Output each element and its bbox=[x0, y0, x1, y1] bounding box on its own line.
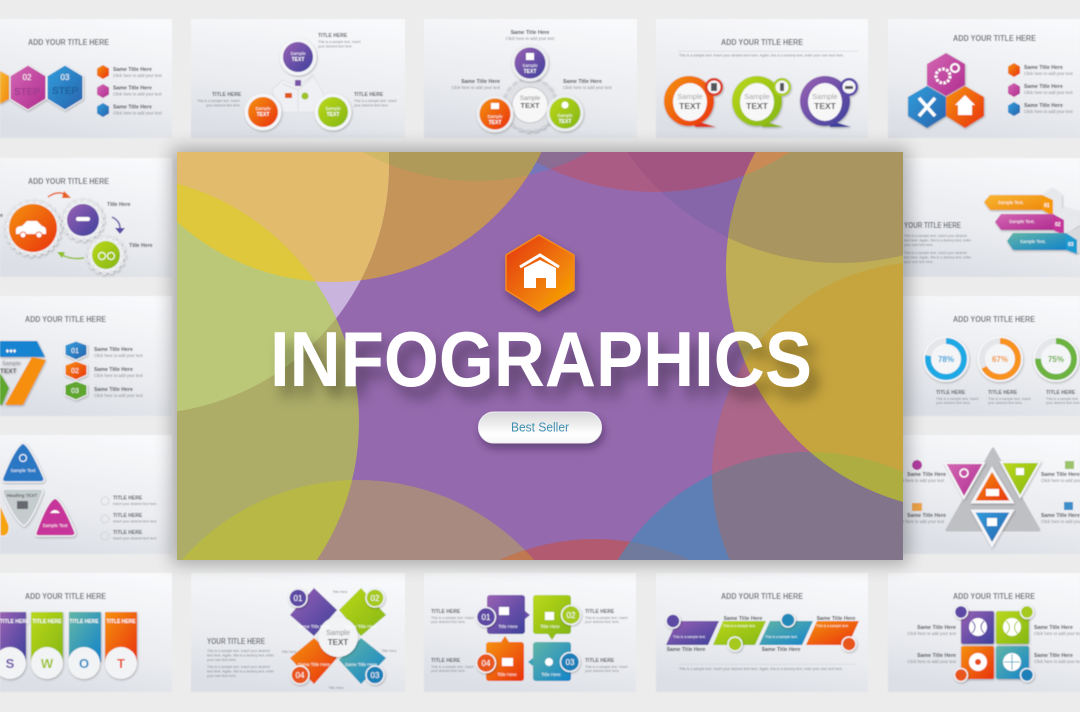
W column bbox=[31, 612, 63, 679]
S column: S bbox=[6, 656, 15, 671]
ring 75: 75% bbox=[1048, 355, 1064, 364]
labels bbox=[431, 609, 628, 673]
step hexagons: 02 bbox=[23, 73, 32, 82]
green circle: Sample bbox=[325, 106, 341, 111]
orange circle: Sample bbox=[255, 106, 271, 111]
gear green bbox=[88, 237, 124, 273]
purple square bbox=[487, 595, 530, 634]
list: Click here to add your text bbox=[1024, 71, 1073, 76]
ring 78: 78% bbox=[938, 355, 954, 364]
arrow 03: 03 bbox=[1068, 242, 1074, 248]
labels: Same Title Here bbox=[724, 616, 763, 622]
text block: This is a sample text. Insert your desired bbox=[207, 649, 270, 653]
S column bbox=[0, 612, 30, 679]
magenta triangle bbox=[35, 498, 75, 536]
card: speech circles bbox=[656, 19, 868, 138]
step hexagons: 03 bbox=[61, 73, 70, 82]
icon: house hexagon bbox=[506, 235, 574, 311]
card: triangle ring bbox=[0, 296, 172, 416]
numbered badges: 03 bbox=[371, 671, 380, 680]
purple circle: Sample bbox=[522, 63, 538, 68]
labels bbox=[936, 390, 1080, 405]
heading: ADD YOUR TITLE HERE bbox=[25, 315, 107, 324]
center gear bbox=[504, 79, 556, 131]
labels: Same Title Here bbox=[817, 616, 856, 622]
center circle: Sample bbox=[326, 630, 350, 637]
orange circle: TEXT bbox=[257, 112, 269, 118]
labels: This is a sample text. Insert bbox=[431, 665, 474, 669]
parallelograms: This is a sample text. bbox=[723, 624, 756, 628]
center gear: TEXT bbox=[520, 101, 540, 110]
T column: TITLE HERE bbox=[106, 619, 136, 625]
arrow 01: Sample Text. bbox=[998, 200, 1024, 205]
labels: Same Title Here bbox=[94, 367, 133, 373]
W column: W bbox=[41, 656, 54, 671]
T column: T bbox=[117, 656, 125, 671]
caption: This is a sample text. Insert your desired text here. Again, this is a dummy text, enter your own text here. bbox=[679, 667, 843, 671]
orange triangle bbox=[973, 469, 1012, 502]
body text: your own text here. bbox=[904, 260, 934, 264]
labels: Same Title Here bbox=[511, 30, 550, 36]
arrow 03: Sample Text. bbox=[1020, 239, 1046, 244]
speech circle 2 bbox=[732, 76, 791, 127]
list: Same Title Here bbox=[1024, 84, 1063, 90]
labels: This is a sample text. bbox=[1046, 397, 1079, 401]
numbered badges bbox=[476, 606, 580, 672]
labels: your desired text here. bbox=[318, 44, 353, 48]
blue square: Title Here bbox=[541, 672, 561, 677]
text block: YOUR TITLE HERE bbox=[207, 637, 266, 646]
hex list: 02 bbox=[71, 368, 79, 375]
labels: Same Title Here bbox=[298, 662, 331, 667]
ring segments bbox=[0, 341, 46, 405]
purple circle bbox=[512, 44, 548, 82]
labels: your desired text here. bbox=[1046, 401, 1080, 405]
text block: This is a sample text. Insert your desired bbox=[207, 665, 270, 669]
labels bbox=[895, 460, 1080, 524]
labels: TITLE HERE bbox=[431, 609, 461, 615]
orange circle: TEXT bbox=[489, 120, 501, 126]
grey triangle bbox=[3, 489, 43, 526]
arrow 02: Sample Text. bbox=[1009, 219, 1035, 224]
labels: TITLE HERE bbox=[585, 658, 615, 664]
green circle: Sample bbox=[557, 113, 573, 118]
body text: text here. Again, this is a dummy text, enter bbox=[904, 238, 972, 242]
badges bbox=[954, 606, 1034, 682]
body text: your own text here. bbox=[904, 243, 934, 247]
card: three hexagons bbox=[888, 19, 1080, 138]
card: percentage rings bbox=[903, 296, 1080, 416]
list: TITLE HERE bbox=[113, 496, 143, 502]
labels: Click here to add your text bbox=[94, 353, 143, 358]
labels: This is a sample text. Insert bbox=[585, 665, 628, 669]
center petals bbox=[272, 75, 324, 112]
heading: YOUR TITLE HERE bbox=[904, 221, 962, 230]
labels: Title Here bbox=[107, 202, 131, 208]
step hexagons: STEP bbox=[52, 86, 78, 97]
labels bbox=[281, 590, 397, 690]
magenta triangle bbox=[945, 463, 984, 498]
list: Insert your desired text here bbox=[113, 520, 157, 524]
labels: Title Here bbox=[281, 650, 297, 654]
orange square: Title Here bbox=[497, 672, 517, 677]
labels: Same Title Here bbox=[1041, 472, 1080, 478]
labels: Same Title Here bbox=[667, 647, 706, 653]
labels: Title Here bbox=[332, 590, 348, 594]
gear orange bbox=[6, 201, 60, 255]
green square: Title Here bbox=[540, 624, 560, 629]
list bbox=[101, 496, 157, 540]
purple square: Title Here bbox=[498, 624, 518, 629]
best seller button: Best Seller bbox=[511, 420, 570, 434]
labels: Click here to add your text bbox=[94, 393, 143, 398]
center circle bbox=[318, 617, 358, 657]
main panel bbox=[177, 152, 903, 560]
speech circle 1 bbox=[664, 76, 723, 127]
arrow 02 bbox=[995, 207, 1080, 235]
labels bbox=[197, 33, 397, 108]
orange circle bbox=[476, 96, 514, 132]
labels: This is a sample text. Insert bbox=[585, 616, 628, 620]
blue triangle bbox=[2, 443, 44, 482]
labels: This is a sample text. Insert bbox=[431, 616, 474, 620]
card: hexagon steps bbox=[0, 19, 172, 138]
speech circle 1: TEXT bbox=[679, 101, 702, 111]
blue triangle bbox=[973, 511, 1012, 545]
labels: Same Title Here bbox=[345, 662, 378, 667]
speech circle 3 bbox=[800, 76, 858, 127]
labels bbox=[667, 616, 856, 653]
labels: Click here to add your text bbox=[907, 659, 957, 664]
labels: Click here to add your text bbox=[907, 631, 957, 636]
S column: TITLE HERE bbox=[0, 619, 30, 625]
arrow orange bbox=[48, 191, 71, 198]
panel background circles bbox=[177, 152, 903, 560]
labels: Same Title Here bbox=[1034, 625, 1073, 631]
labels: TITLE HERE bbox=[431, 658, 461, 664]
heading: ADD YOUR TITLE HERE bbox=[953, 592, 1036, 601]
arrow 01: 01 bbox=[1044, 203, 1050, 209]
arrow 03 bbox=[1007, 227, 1080, 254]
T column bbox=[105, 612, 137, 679]
center circle: TEXT bbox=[328, 638, 348, 647]
labels: your desired text here. bbox=[988, 401, 1023, 405]
labels: Same Title Here bbox=[1034, 653, 1073, 659]
list: Same Title Here bbox=[1024, 65, 1063, 71]
labels: your desired text here. bbox=[936, 401, 971, 405]
purple circle: Sample bbox=[290, 51, 306, 56]
step list bbox=[97, 65, 162, 117]
gear purple bbox=[63, 200, 103, 240]
grey triangle: Heading TEXT bbox=[7, 493, 37, 498]
grey base triangle bbox=[947, 449, 1039, 530]
labels: Same Title Here bbox=[345, 624, 378, 629]
labels: Same Title Here bbox=[917, 653, 956, 659]
parallelograms bbox=[666, 621, 859, 645]
step hexagons bbox=[0, 65, 83, 110]
labels: TITLE HERE bbox=[1046, 390, 1076, 396]
labels: Title Here bbox=[328, 686, 344, 690]
list: Click here to add your text bbox=[1024, 109, 1073, 114]
card: speech circles: This is a sample text. Insert your desired text here. Again, this is a dummy text, enter your own text here. bbox=[679, 54, 844, 58]
card: four squares bbox=[424, 573, 636, 692]
list: Click here to add your text bbox=[1024, 90, 1073, 95]
orange square bbox=[486, 636, 524, 681]
labels: Click here to add your text bbox=[506, 36, 555, 41]
body text: This is a sample text. Insert your desired bbox=[904, 251, 967, 255]
step list: Same Title Here bbox=[113, 67, 152, 73]
labels: TITLE HERE bbox=[936, 390, 966, 396]
text block: text here. Again, this is a dummy text, enter bbox=[207, 654, 275, 658]
card: gears and vehicles bbox=[0, 158, 172, 277]
speech circle 2: Sample bbox=[744, 92, 770, 101]
arrow 01 bbox=[984, 188, 1062, 216]
list: TITLE HERE bbox=[113, 530, 143, 536]
labels: your desired text here. bbox=[206, 104, 241, 108]
labels: TITLE HERE bbox=[354, 92, 384, 98]
numbered badges: 02 bbox=[567, 611, 576, 620]
labels bbox=[0, 202, 153, 249]
speech circle 2: TEXT bbox=[746, 101, 769, 111]
step list: Same Title Here bbox=[113, 104, 152, 110]
squares bbox=[961, 611, 1029, 679]
heading: ADD YOUR TITLE HERE bbox=[28, 38, 110, 47]
step list: Click here to add your text bbox=[113, 110, 162, 116]
labels: This is a sample text. Insert bbox=[197, 99, 240, 103]
ring 75 bbox=[1033, 336, 1079, 382]
text block: your own text here. bbox=[207, 658, 237, 662]
speech circle 3: TEXT bbox=[814, 101, 837, 111]
numbered badges: 04 bbox=[482, 659, 491, 668]
labels: TITLE HERE bbox=[988, 390, 1018, 396]
hex list bbox=[65, 341, 87, 400]
center gear: Sample bbox=[520, 96, 541, 102]
labels: This is a sample text. Insert bbox=[318, 40, 361, 44]
card: gear circles bbox=[424, 19, 637, 138]
text block: your own text here. bbox=[207, 674, 237, 678]
O column: O bbox=[79, 656, 89, 671]
magenta triangle: Sample Text bbox=[43, 523, 68, 528]
card: rounded triangles bbox=[0, 435, 172, 554]
ring 78 bbox=[923, 336, 969, 382]
green diamond bbox=[339, 588, 386, 636]
labels: TITLE HERE bbox=[585, 609, 615, 615]
blue diamond bbox=[339, 638, 386, 684]
card: SWOT bbox=[0, 573, 172, 692]
labels: This is a sample text. Insert bbox=[936, 397, 979, 401]
O column bbox=[68, 612, 101, 679]
labels: Same Title Here bbox=[907, 513, 946, 519]
labels: Same Title Here bbox=[907, 472, 946, 478]
numbered badges: 01 bbox=[294, 594, 303, 603]
blue triangle: Sample Text bbox=[11, 468, 36, 473]
labels: Same Title Here bbox=[917, 625, 956, 631]
parallelograms: This is a sample text. bbox=[816, 624, 849, 628]
card: parallelogram steps bbox=[656, 573, 868, 692]
text block bbox=[207, 637, 275, 678]
hex list: 01 bbox=[71, 348, 79, 355]
numbered badges: 02 bbox=[371, 594, 380, 603]
labels: Click here to add your text bbox=[563, 85, 612, 90]
parallelograms: This is a sample text. bbox=[673, 635, 706, 639]
ring segments: Sample bbox=[2, 361, 21, 367]
labels: TITLE HERE bbox=[318, 33, 348, 39]
labels: your desired text here. bbox=[585, 669, 620, 673]
green circle: TEXT bbox=[327, 112, 339, 118]
purple circle bbox=[280, 38, 316, 76]
labels: Click here to add your text bbox=[895, 519, 945, 524]
numbered badges: 03 bbox=[566, 658, 575, 667]
card: sports squares bbox=[888, 573, 1080, 692]
list: TITLE HERE bbox=[113, 513, 143, 519]
best seller button bbox=[478, 412, 602, 443]
labels: Title Here bbox=[381, 649, 397, 653]
speech circle 3: Sample bbox=[812, 92, 838, 101]
list: Insert your desired text here bbox=[113, 502, 157, 506]
labels bbox=[451, 30, 612, 90]
labels: This is a sample text. Insert bbox=[354, 99, 397, 103]
list: Same Title Here bbox=[1024, 103, 1063, 109]
numbered badges bbox=[289, 589, 384, 684]
card: triangle star bbox=[895, 435, 1080, 554]
labels: your desired text here. bbox=[431, 620, 466, 624]
heading: ADD YOUR TITLE HERE bbox=[953, 34, 1037, 43]
body text: This is a sample text. Insert your desired bbox=[904, 234, 967, 238]
step list: Click here to add your text bbox=[113, 92, 162, 96]
blue square bbox=[528, 642, 571, 681]
labels: Click here to add your text bbox=[895, 478, 945, 483]
step hexagons: STEP bbox=[14, 87, 40, 98]
step list: Same Title Here bbox=[113, 86, 152, 92]
parallelograms: This is a sample text. bbox=[765, 635, 798, 639]
numbered badges: 04 bbox=[296, 671, 305, 680]
arrow purple bbox=[112, 217, 125, 234]
arrow 02: 02 bbox=[1055, 222, 1061, 228]
heading: ADD YOUR TITLE HERE bbox=[721, 592, 804, 601]
green triangle bbox=[1001, 462, 1040, 497]
body text bbox=[904, 234, 972, 264]
ring 67: 67% bbox=[992, 355, 1008, 364]
labels: your desired text here. bbox=[431, 669, 466, 673]
orange diamond bbox=[290, 638, 337, 684]
heading: ADD YOUR TITLE HERE bbox=[25, 592, 107, 601]
labels: Same Title Here bbox=[461, 79, 500, 85]
labels: Same Title Here bbox=[563, 79, 602, 85]
orange circle bbox=[244, 94, 282, 130]
labels: TITLE HERE bbox=[212, 92, 242, 98]
ring 67 bbox=[977, 336, 1023, 382]
list bbox=[1008, 63, 1073, 116]
labels: Click here to add your text bbox=[451, 85, 501, 90]
labels: Same Title Here bbox=[298, 624, 331, 629]
title: INFOGRAPHICS bbox=[270, 315, 812, 403]
text block: text here. Again, this is a dummy text, enter bbox=[207, 670, 275, 674]
hexagon cluster bbox=[908, 53, 984, 128]
arrow green bbox=[57, 252, 84, 259]
numbered badges: 01 bbox=[482, 613, 491, 622]
green circle bbox=[546, 94, 584, 132]
heading: ADD YOUR TITLE HERE bbox=[953, 315, 1036, 324]
O column: TITLE HERE bbox=[69, 619, 99, 625]
labels: This is a sample text. Insert bbox=[988, 397, 1031, 401]
labels: Same Title Here bbox=[94, 347, 133, 353]
green square bbox=[533, 595, 571, 640]
green circle: TEXT bbox=[559, 119, 571, 125]
labels: Click here to add your text bbox=[94, 373, 143, 378]
card: 3D arrows bbox=[903, 158, 1080, 277]
body text: text here. Again, this is a dummy text, enter bbox=[904, 256, 972, 260]
badges bbox=[666, 613, 856, 651]
list: Insert your desired text here bbox=[113, 536, 157, 540]
purple diamond bbox=[290, 588, 337, 636]
speech circle 1: Sample bbox=[677, 92, 703, 101]
labels: Same Title Here bbox=[1041, 513, 1080, 519]
labels: Same Title Here bbox=[762, 647, 801, 653]
labels bbox=[94, 347, 143, 398]
orange triangle bbox=[0, 504, 9, 536]
hex list: 03 bbox=[71, 388, 79, 395]
labels: your desired text here. bbox=[585, 620, 620, 624]
labels: Same Title Here bbox=[94, 387, 133, 393]
card: four diamonds bbox=[191, 573, 405, 692]
orange circle: Sample bbox=[487, 114, 503, 119]
card: three circles bbox=[191, 19, 405, 138]
purple circle: TEXT bbox=[292, 57, 304, 63]
ring segments: TEXT bbox=[0, 368, 17, 375]
green circle bbox=[314, 94, 352, 130]
W column: TITLE HERE bbox=[32, 619, 62, 625]
heading: ADD YOUR TITLE HERE bbox=[721, 38, 804, 47]
labels: your desired text here. bbox=[354, 104, 389, 108]
labels bbox=[907, 625, 1080, 664]
ring segments: ♦♦♦ bbox=[6, 348, 17, 355]
heading: ADD YOUR TITLE HERE bbox=[28, 177, 110, 186]
labels: Title Here bbox=[129, 243, 153, 249]
purple circle: TEXT bbox=[524, 69, 536, 75]
step list: Click here to add your text bbox=[113, 73, 162, 78]
